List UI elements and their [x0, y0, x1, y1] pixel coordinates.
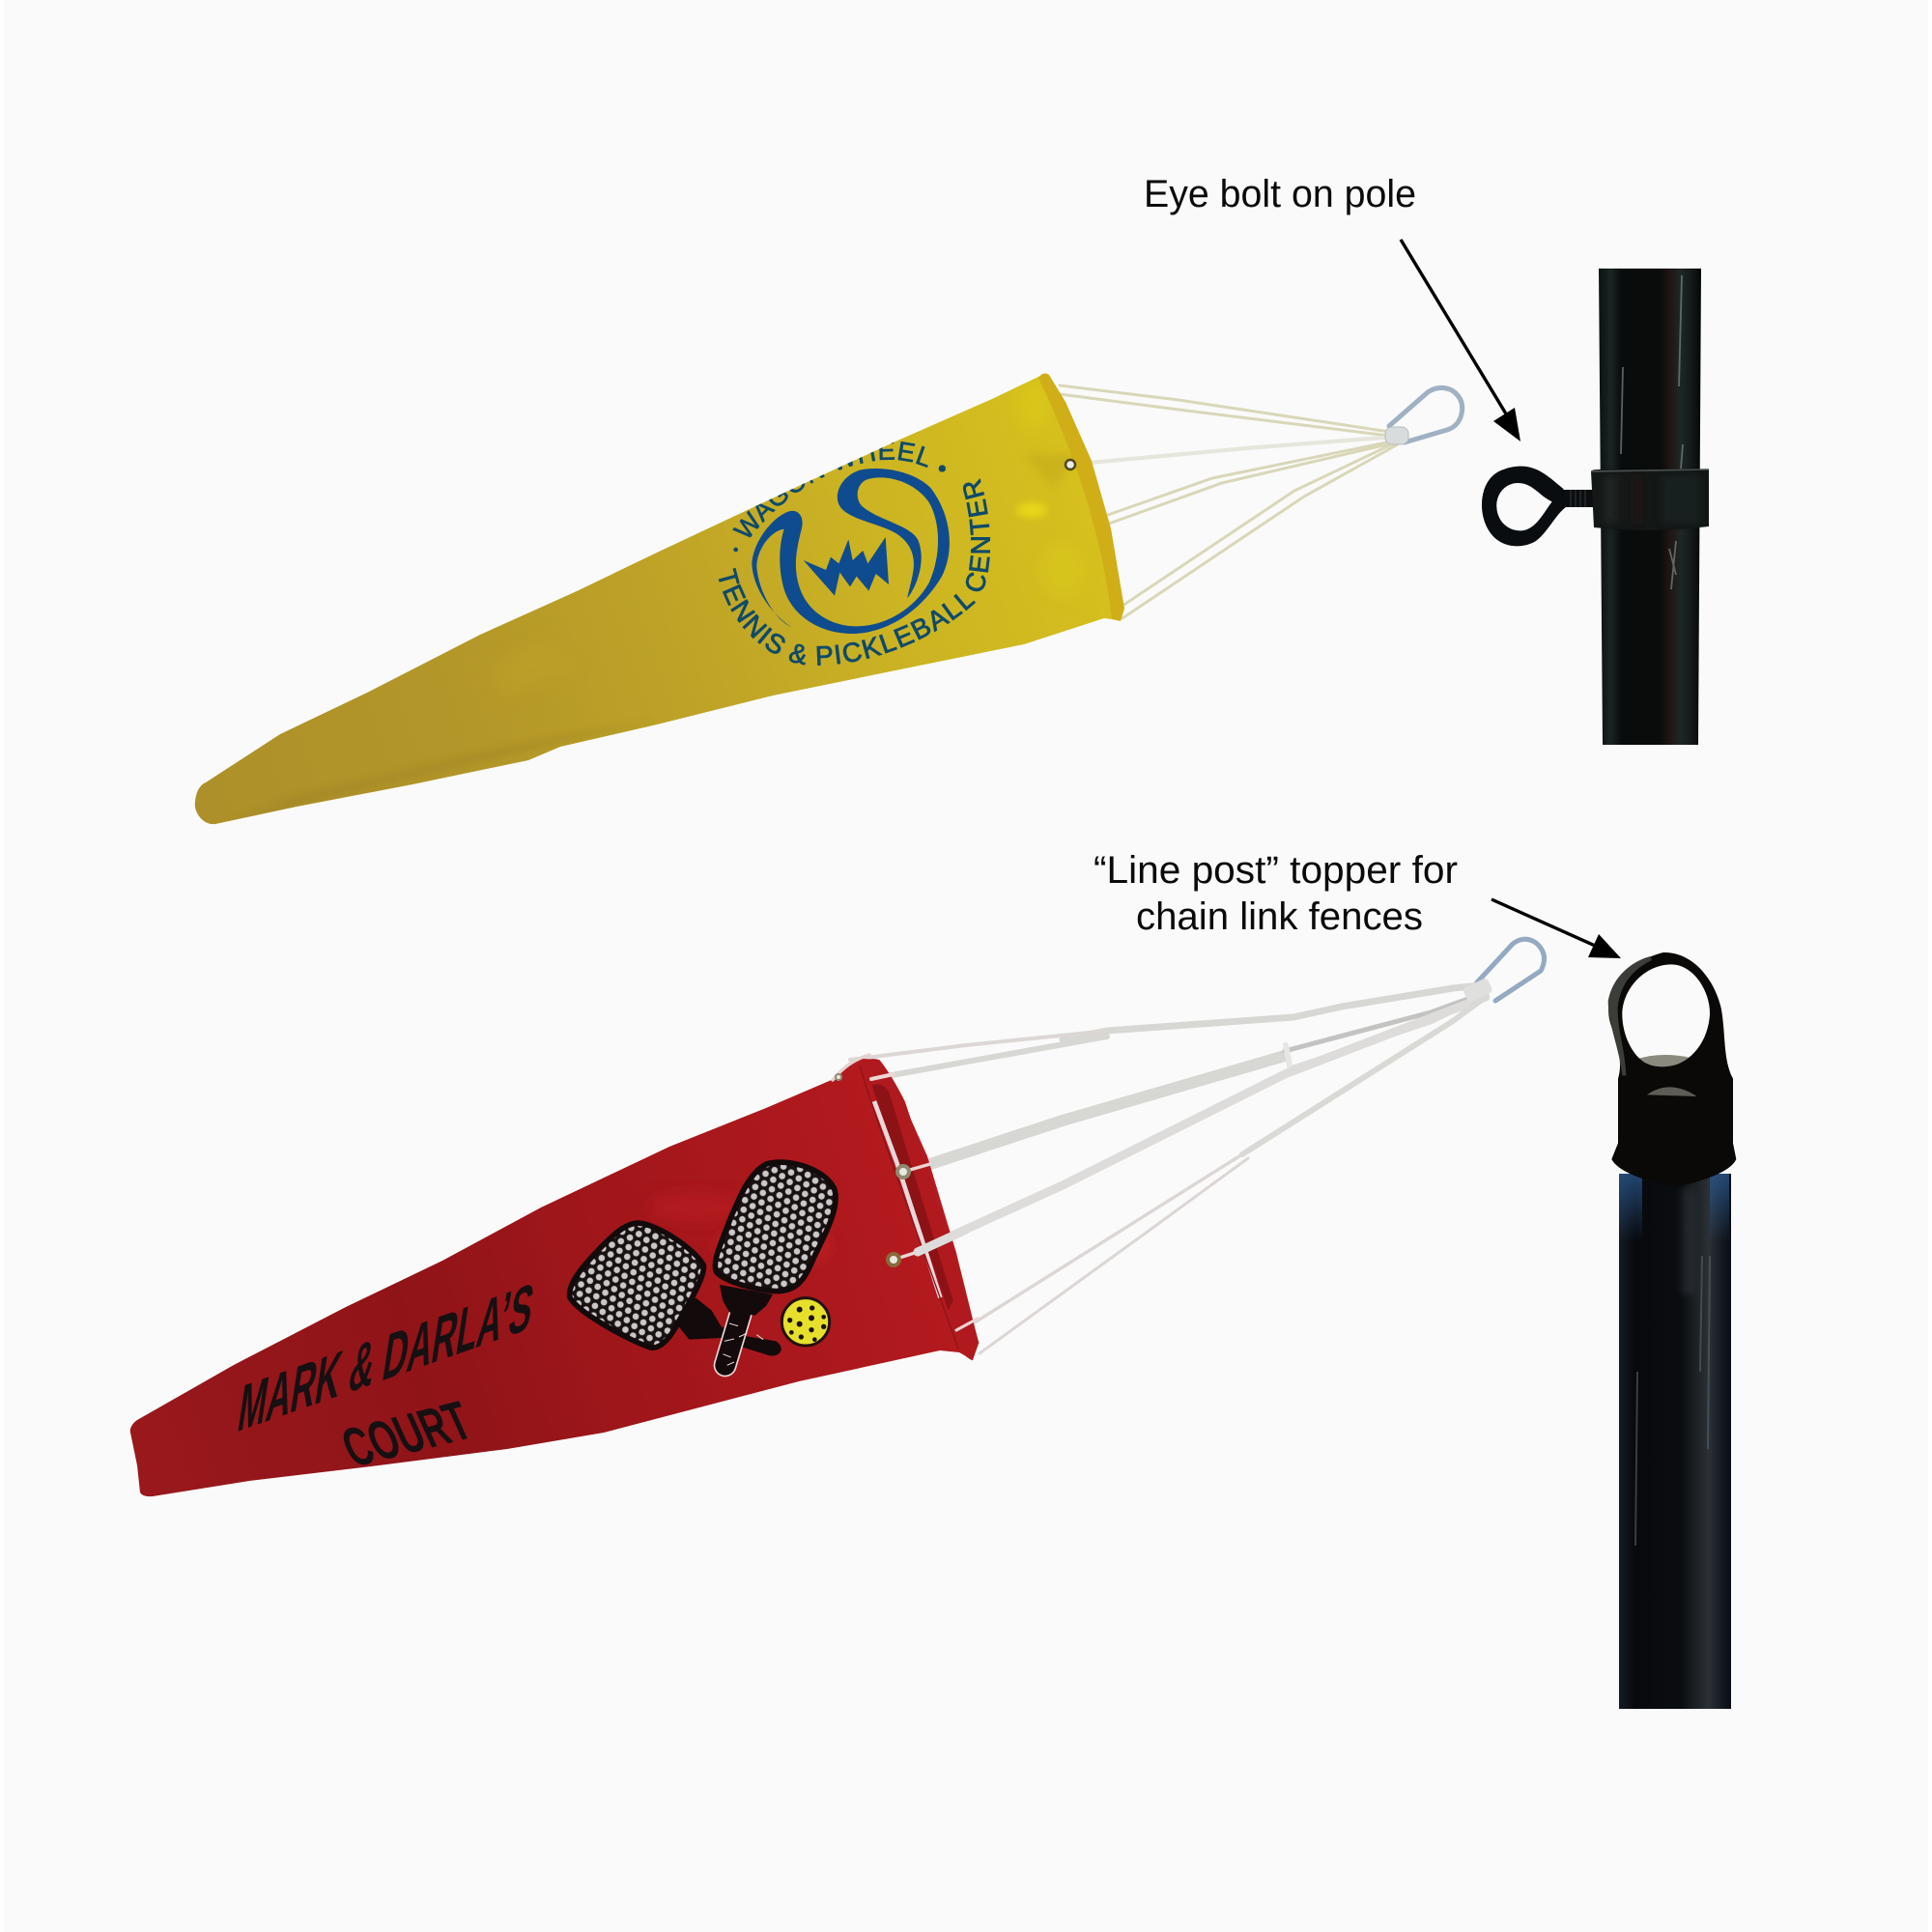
arrow: to topper: [1492, 899, 1621, 958]
fabric highlights: [655, 1195, 827, 1260]
grommets: [836, 1074, 909, 1265]
label: eye bolt on pole: Eye bolt on pole: [1144, 173, 1416, 215]
topper gloss on loop: [1608, 956, 1652, 1075]
logo dots: [733, 465, 946, 552]
label: line post topper: [1094, 849, 1458, 938]
text: Court: COURT: [333, 1390, 481, 1479]
red windsock strings: [850, 985, 1486, 1353]
pole scratches: [1621, 275, 1683, 589]
label: line post topper: chain link fences: [1136, 895, 1423, 938]
string group: bottom: [975, 997, 1486, 1353]
pole blue reflection: [1619, 1174, 1729, 1294]
topper sleeve reflection: [1647, 1087, 1697, 1096]
handle: front paddle: [720, 1285, 773, 1365]
strings passing over the rim: [833, 1055, 978, 1330]
crossed pickleball paddles: [570, 1162, 836, 1365]
carabiner: red windsock: [1463, 939, 1545, 1003]
pole with line post topper: [1608, 952, 1736, 1709]
yellow sock grommet: [1065, 460, 1075, 469]
yellow windsock strings: [1060, 385, 1398, 618]
string group: lower middle: [923, 997, 1486, 1249]
string group: top: [850, 985, 1481, 1075]
pole shaft: [1619, 1174, 1731, 1709]
eye bolt shank with thread: [1563, 490, 1598, 507]
carabiner: yellow windsock: [1385, 387, 1463, 444]
string group: upper middle: [930, 993, 1486, 1164]
label: line post topper: “Line post” topper for: [1094, 849, 1458, 892]
red windsock: [130, 1055, 979, 1496]
paddle: back: [570, 1223, 703, 1348]
yellow windsock: [195, 373, 1124, 825]
eye bolt ring: [1482, 467, 1568, 546]
fabric highlights: [232, 381, 1086, 821]
logo ring text: top: WAGON WHEEL: [732, 440, 928, 537]
pickleball: [781, 1298, 830, 1346]
handle: back paddle: [676, 1297, 781, 1356]
logo swoosh ball: [752, 469, 950, 634]
pole collar: [1591, 469, 1709, 530]
pole reflections: [1635, 1256, 1710, 1546]
topper loop and sleeve: [1608, 952, 1736, 1187]
pole with eye bolt: [1482, 269, 1709, 745]
logo: Wagon Wheel: [719, 440, 991, 666]
logo ring text: bottom: TENNIS & PICKLEBALL CENTER: [719, 478, 991, 666]
topper: [1608, 952, 1736, 1187]
logo WW monogram: [804, 537, 889, 596]
yellow sock rim: [1038, 374, 1124, 621]
pole shaft: [1599, 269, 1701, 745]
paddle: front: [715, 1162, 836, 1292]
arrow: to eye bolt: [1401, 240, 1520, 441]
red sock rim: [860, 1059, 979, 1360]
text: Mark and Darla's: MARK & DARLA’S: [234, 1269, 538, 1447]
topper dome inside loop: [1635, 1055, 1690, 1072]
